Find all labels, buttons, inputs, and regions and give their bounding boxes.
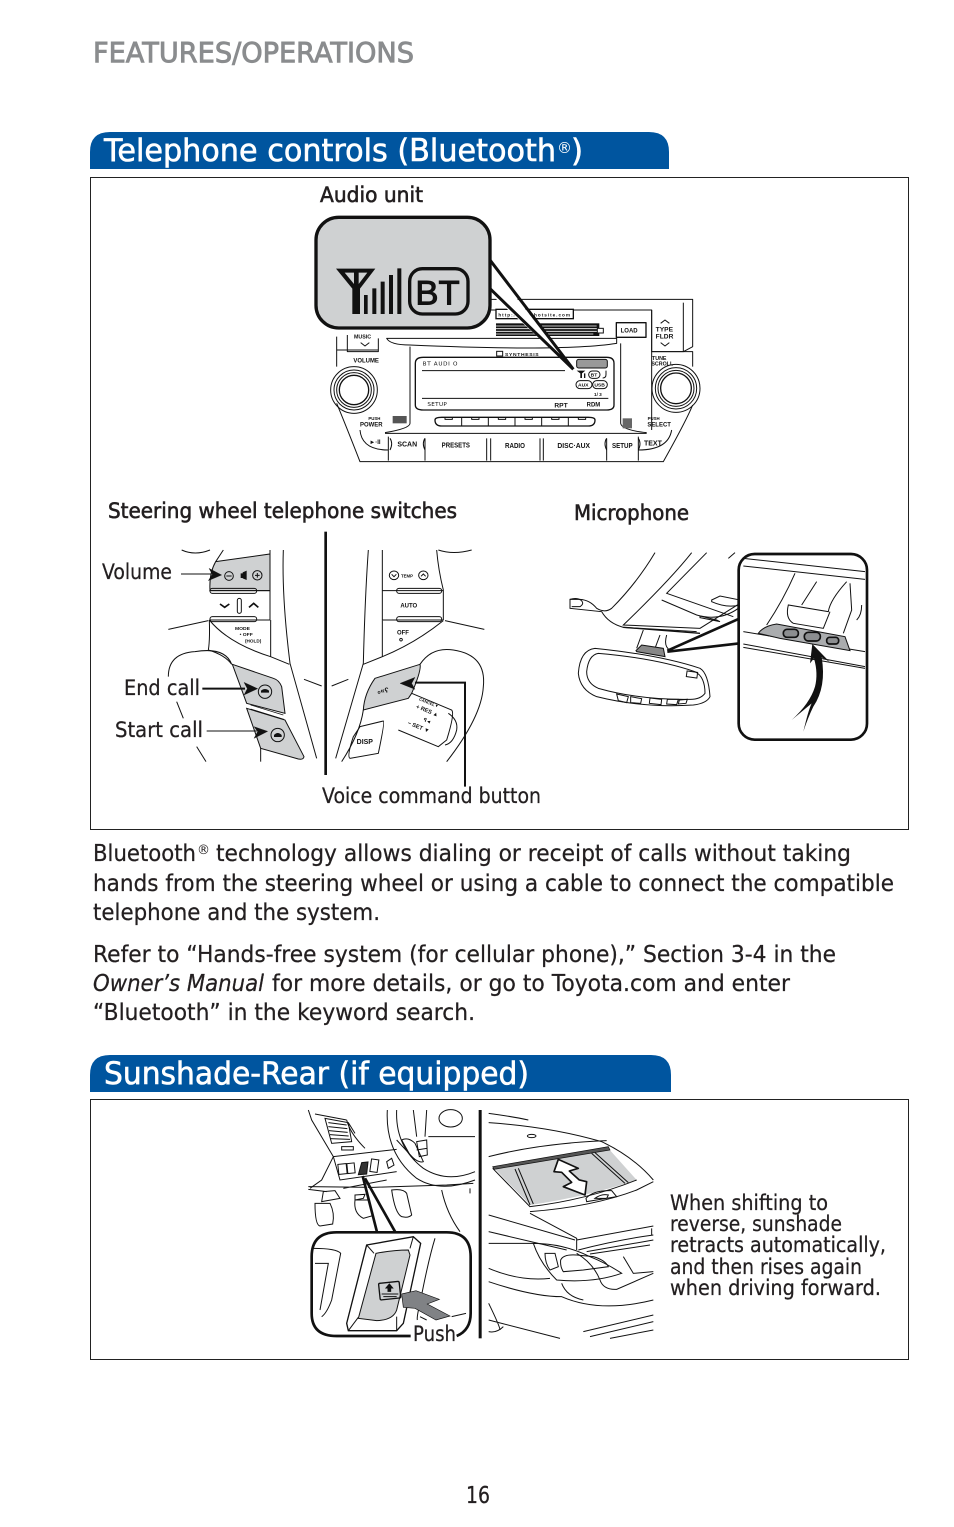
- body text: reference paragraph: Refer to “Hands-free system (for cellular phone),” Section 3-4 in the: [93, 942, 836, 968]
- sunshade description: and then rises again: [670, 1255, 862, 1279]
- audio unit illustration: VOLUME: [353, 359, 379, 365]
- steering wheel switches illustration: [168, 532, 484, 787]
- panel: telephone controls: [90, 178, 908, 830]
- audio unit illustration: DISC·AUX: [557, 443, 590, 450]
- steering wheel switches illustration: ꟼ◄: [422, 717, 432, 726]
- steering wheel switches illustration: ₒ«ʕ: [377, 685, 389, 695]
- label: steering wheel switches: Steering wheel telephone switches: [108, 499, 457, 523]
- body text: bluetooth paragraph: telephone and the system.: [93, 900, 380, 926]
- section header: sunshade: Sunshade-Rear (if equipped): [104, 1056, 529, 1092]
- body text: reference paragraph: Owner’s Manual: [93, 971, 265, 997]
- car rear: [493, 1148, 637, 1205]
- audio unit illustration: 1/ 3: [594, 392, 602, 397]
- steering wheel switches illustration: • OFF: [240, 632, 253, 638]
- steering wheel switches illustration: DISP: [357, 739, 373, 746]
- label: microphone: Microphone: [574, 501, 689, 525]
- audio unit illustration: AUX: [578, 383, 589, 389]
- audio unit illustration: BT: [591, 373, 597, 379]
- sunshade description: When shifting to: [670, 1191, 828, 1215]
- steering wheel switches illustration: MODE: [235, 626, 251, 632]
- dashboard: [308, 1110, 475, 1232]
- label: push: Push: [413, 1322, 456, 1346]
- audio unit illustration: BT: [415, 274, 460, 312]
- audio unit illustration: PUSH: [648, 416, 660, 421]
- audio unit illustration: SETUP: [427, 402, 447, 408]
- sunshade description: [670, 1191, 886, 1300]
- audio unit illustration: TEXT: [644, 440, 663, 447]
- callout bubble: [483, 257, 573, 369]
- sunshade description: retracts automatically,: [670, 1233, 886, 1257]
- steering wheel switches illustration: AUTO: [400, 603, 418, 609]
- section header: telephone controls: Telephone controls (Bluetooth: [103, 133, 556, 169]
- audio unit illustration: RADIO: [505, 443, 525, 450]
- page number: 16: [466, 1483, 490, 1509]
- audio unit illustration: SCAN: [397, 442, 417, 449]
- audio unit illustration: POWER: [360, 423, 383, 429]
- audio unit illustration: PRESETS: [442, 442, 470, 449]
- label: audio unit: Audio unit: [320, 183, 423, 207]
- steering wheel switches illustration: TEMP: [401, 573, 413, 578]
- audio unit illustration: SETUP: [612, 443, 633, 450]
- audio unit illustration: MUSIC: [354, 334, 371, 340]
- steering wheel switches illustration: − SET ▼: [407, 721, 430, 735]
- steering wheel switches illustration: CANCEL▼: [418, 697, 439, 709]
- audio unit illustration: USB: [594, 383, 605, 389]
- panel: sunshade: [90, 1100, 908, 1360]
- audio unit illustration: http://www.hotsite.com: [498, 313, 570, 318]
- sunshade description: reverse, sunshade: [670, 1212, 842, 1236]
- microphone illustration: [570, 553, 867, 740]
- body text: reference paragraph: “Bluetooth” in the keyword search.: [93, 1000, 475, 1026]
- audio unit illustration: SELECT: [647, 423, 671, 429]
- audio unit illustration: ►·II: [369, 440, 381, 446]
- audio unit illustration: PUSH: [368, 416, 380, 421]
- page heading: FEATURES/OPERATIONS: [93, 36, 414, 69]
- body text: reference paragraph: [93, 942, 836, 1026]
- audio unit illustration: TYPE: [656, 327, 674, 334]
- audio unit illustration: TUNE: [652, 356, 667, 362]
- body text: reference paragraph: for more details, or go to Toyota.com and enter: [272, 971, 791, 997]
- arrows: callout leaders: [181, 568, 465, 787]
- sunshade description: when driving forward.: [670, 1276, 881, 1300]
- body text: bluetooth paragraph: Bluetooth: [93, 841, 196, 867]
- section header: telephone controls: ®: [557, 139, 572, 157]
- label: volume: Volume: [102, 560, 172, 584]
- label: voice command button: Voice command button: [322, 784, 541, 808]
- body text: bluetooth paragraph: ®: [197, 843, 210, 858]
- body text: bluetooth paragraph: [93, 841, 894, 926]
- steering wheel switches illustration: (HOLD): [245, 639, 262, 644]
- audio unit illustration: RDM: [587, 403, 600, 409]
- audio unit illustration: SCROLL: [651, 362, 674, 368]
- audio unit illustration: SYNTHESIS: [505, 352, 539, 358]
- audio unit illustration: FLDR: [656, 333, 674, 340]
- audio unit illustration: LOAD: [621, 329, 638, 335]
- steering wheel switches illustration: OFF: [397, 630, 409, 636]
- label: end call: End call: [124, 676, 200, 700]
- steering wheel switches illustration: + RES ▲: [415, 704, 439, 719]
- body text: bluetooth paragraph: technology allows dialing or receipt of calls without taking: [216, 841, 851, 867]
- left volume knob: [331, 364, 700, 413]
- label: start call: Start call: [115, 718, 203, 742]
- audio unit illustration: BT AUDI O: [423, 362, 458, 368]
- sunshade illustration: [308, 1110, 653, 1338]
- section header: telephone controls: ): [571, 133, 583, 169]
- body text: bluetooth paragraph: hands from the steering wheel or using a cable to connect the compatible: [93, 871, 894, 897]
- audio unit illustration: [316, 217, 700, 462]
- audio unit illustration: RPT: [554, 402, 568, 409]
